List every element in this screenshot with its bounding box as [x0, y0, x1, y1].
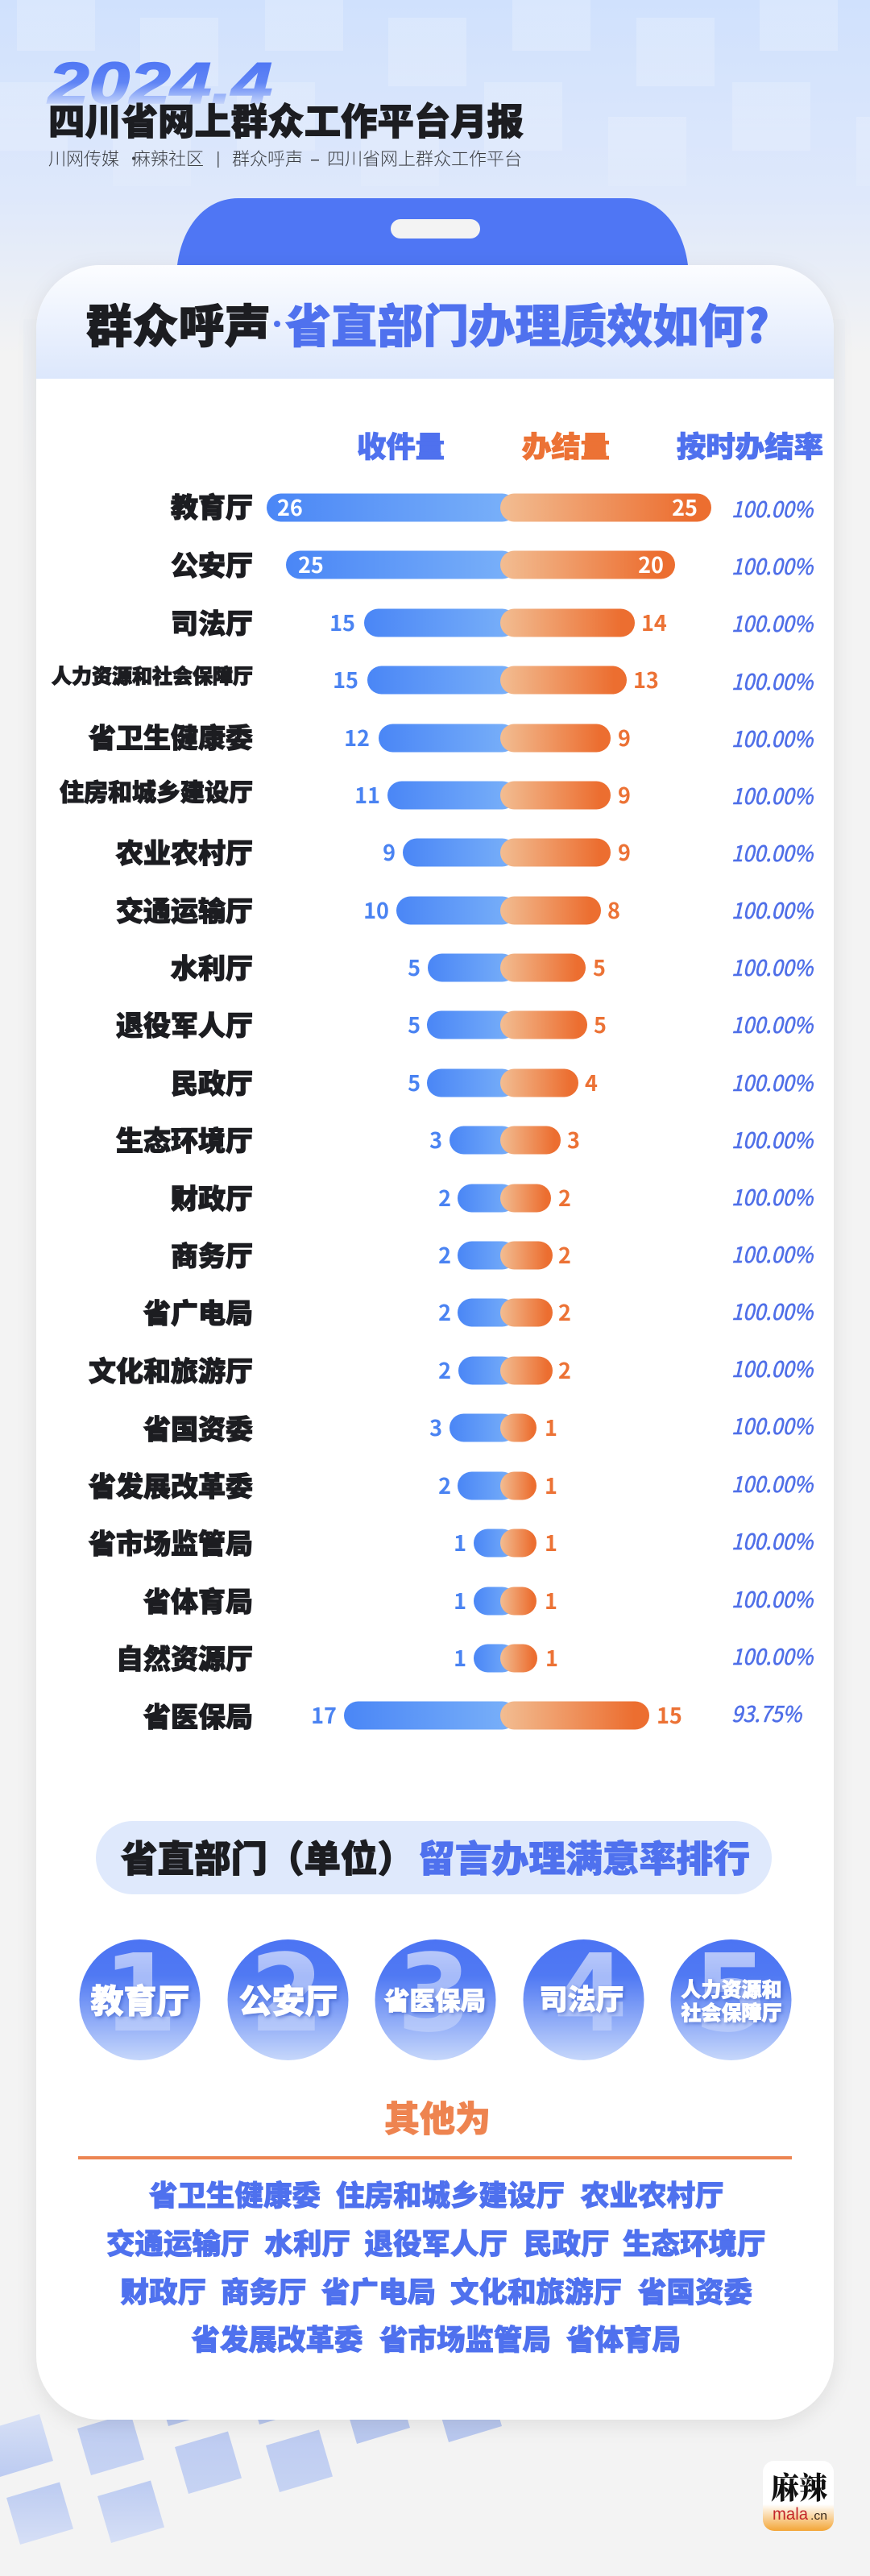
row: 农业农村厅: 9	[618, 836, 631, 867]
row: 民政厅	[171, 1062, 814, 1101]
row: 水利厅	[171, 947, 814, 986]
column headers: 办结量	[522, 424, 610, 466]
row: 交通运输厅: 交通运输厅	[116, 890, 253, 929]
section heading pill: satisfaction ranking: 省直部门（单位）	[121, 1830, 414, 1883]
rank 4 circle: 4	[553, 1932, 628, 2056]
rank 4 circle: 司法厅	[539, 1977, 624, 2018]
row: 省广电局: 100.00%	[731, 1295, 814, 1326]
logo: mala.cn	[763, 2461, 834, 2531]
row: 商务厅: 2	[438, 1238, 451, 1270]
row: 教育厅: 26	[277, 491, 303, 522]
rank 5 circle: 5	[694, 1932, 768, 2056]
others list: 住房和城乡建设厅	[336, 2180, 565, 2212]
rank 1 circle: 教育厅	[90, 1974, 190, 2022]
logo: mala.cn: .cn	[810, 2509, 827, 2523]
others list: 民政厅	[524, 2228, 610, 2260]
row: 教育厅	[171, 486, 814, 525]
row: 交通运输厅: 8	[607, 894, 620, 925]
row: 司法厅: 100.00%	[731, 607, 814, 638]
row: 公安厅: 公安厅	[171, 544, 253, 583]
rank 2 circle: 2	[250, 1932, 324, 2056]
row: 生态环境厅: 100.00%	[731, 1123, 814, 1155]
others list	[106, 2180, 766, 2356]
row: 省体育局: 100.00%	[731, 1583, 814, 1614]
row: 省国资委: 100.00%	[731, 1409, 814, 1441]
row: 生态环境厅: 3	[567, 1123, 580, 1155]
row: 省体育局: 省体育局	[143, 1580, 253, 1620]
row: 省广电局: 2	[438, 1296, 451, 1327]
row: 省市场监管局: 100.00%	[731, 1524, 814, 1556]
row: 人力资源和社会保障厅: 13	[633, 663, 659, 695]
row: 民政厅: 4	[585, 1066, 598, 1097]
others list: 退役军人厅	[364, 2228, 508, 2260]
row: 财政厅: 2	[558, 1181, 571, 1213]
rank 2 circle: 公安厅	[238, 1974, 338, 2022]
section heading pill: satisfaction ranking	[96, 1821, 772, 1894]
row: 民政厅: 民政厅	[171, 1062, 253, 1101]
column headers: 收件量	[357, 424, 445, 466]
row: 文化和旅游厅: 文化和旅游厅	[89, 1350, 253, 1389]
row: 住房和城乡建设厅: 住房和城乡建设厅	[60, 773, 253, 808]
row: 司法厅: 司法厅	[171, 602, 253, 641]
rank 3 circle	[375, 1932, 496, 2060]
row: 住房和城乡建设厅: 11	[354, 778, 380, 810]
main card	[36, 265, 834, 2420]
row: 商务厅: 2	[558, 1238, 571, 1270]
row: 财政厅	[171, 1177, 814, 1217]
row: 人力资源和社会保障厅: 15	[333, 663, 358, 695]
row: 住房和城乡建设厅: 9	[618, 778, 631, 810]
row: 财政厅: 财政厅	[171, 1177, 253, 1217]
others list: 省广电局	[321, 2276, 436, 2308]
row: 商务厅: 商务厅	[171, 1234, 253, 1274]
row: 司法厅	[171, 602, 814, 641]
row: 住房和城乡建设厅: 100.00%	[731, 779, 814, 811]
row: 商务厅	[171, 1234, 814, 1274]
row: 人力资源和社会保障厅: 人力资源和社会保障厅	[52, 661, 253, 690]
rank 1 circle	[79, 1932, 200, 2060]
row: 公安厅: 20	[638, 548, 664, 579]
card title: 群众呼声	[86, 290, 271, 356]
row: 省卫生健康委: 100.00%	[731, 722, 814, 753]
others list: 财政厅	[121, 2276, 206, 2308]
column headers: 按时办结率	[677, 424, 823, 466]
others list: 生态环境厅	[623, 2228, 766, 2260]
subtitle: 麻辣社区	[133, 145, 204, 171]
row: 省国资委: 3	[429, 1411, 442, 1442]
column headers	[357, 424, 823, 466]
row: 省国资委	[143, 1408, 814, 1447]
row: 退役军人厅: 5	[594, 1008, 607, 1039]
row: 人力资源和社会保障厅	[52, 661, 814, 696]
row: 住房和城乡建设厅	[60, 773, 814, 811]
row: 文化和旅游厅: 2	[558, 1354, 571, 1385]
row: 文化和旅游厅: 2	[438, 1354, 451, 1385]
row: 省卫生健康委: 省卫生健康委	[89, 716, 253, 756]
rank 3 circle: 省医保局	[384, 1981, 486, 2018]
others list: 交通运输厅	[106, 2228, 250, 2260]
section heading pill: satisfaction ranking: 留言办理满意率排行	[418, 1830, 750, 1883]
subtitle	[48, 145, 522, 171]
others heading: 其他为	[384, 2090, 491, 2142]
others list: 省发展改革委	[192, 2324, 363, 2356]
row: 省市场监管局: 1	[545, 1526, 557, 1558]
row: 自然资源厅: 1	[545, 1641, 558, 1673]
clipboard tab	[177, 198, 688, 270]
row: 司法厅: 15	[329, 606, 355, 637]
row: 省卫生健康委	[89, 716, 814, 756]
main title: 四川省网上群众工作平台月报	[48, 93, 524, 146]
rank 5 circle	[670, 1932, 791, 2060]
row: 生态环境厅: 生态环境厅	[116, 1119, 253, 1159]
row: 自然资源厅: 100.00%	[731, 1640, 814, 1671]
row: 省广电局	[143, 1292, 814, 1331]
rank 2 circle	[227, 1932, 348, 2060]
row: 省发展改革委: 1	[545, 1469, 557, 1500]
row: 交通运输厅: 10	[363, 894, 389, 925]
row: 省广电局: 省广电局	[143, 1292, 253, 1331]
row: 省医保局: 省医保局	[143, 1695, 253, 1735]
row: 生态环境厅: 3	[429, 1123, 442, 1155]
subtitle: ·	[125, 145, 143, 171]
others list: 省国资委	[638, 2276, 752, 2308]
row: 省市场监管局: 省市场监管局	[89, 1522, 253, 1562]
others list: 省卫生健康委	[149, 2180, 321, 2212]
row: 交通运输厅	[116, 890, 814, 929]
row: 自然资源厅: 自然资源厅	[116, 1637, 253, 1677]
row: 农业农村厅	[116, 832, 814, 871]
row: 农业农村厅: 9	[383, 836, 396, 867]
subtitle: 群众呼声	[232, 145, 303, 171]
row: 水利厅: 5	[593, 951, 606, 982]
row: 财政厅: 100.00%	[731, 1180, 814, 1212]
rank 5 circle: 人力资源和	[681, 1974, 782, 2003]
row: 省体育局	[143, 1580, 814, 1620]
subtitle: 川网传媒	[48, 145, 119, 171]
row: 交通运输厅: 100.00%	[731, 894, 814, 925]
others list: 商务厅	[221, 2276, 307, 2308]
row: 省医保局: 93.75%	[731, 1697, 803, 1728]
row: 公安厅	[171, 544, 814, 583]
row: 退役军人厅: 5	[408, 1008, 420, 1039]
row: 公安厅: 100.00%	[731, 550, 814, 581]
row: 省医保局	[143, 1695, 803, 1735]
row: 自然资源厅	[116, 1637, 814, 1677]
rank 4 circle	[524, 1932, 644, 2060]
row: 农业农村厅: 农业农村厅	[116, 832, 253, 871]
row: 水利厅: 100.00%	[731, 951, 814, 982]
card title: 省直部门办理质效如何?	[285, 290, 769, 356]
others list: 农业农村厅	[581, 2180, 724, 2212]
row: 退役军人厅: 退役军人厅	[116, 1004, 253, 1043]
row: 教育厅: 教育厅	[171, 486, 253, 525]
row: 农业农村厅: 100.00%	[731, 836, 814, 868]
rank 3 circle: 3	[397, 1932, 471, 2056]
row: 省发展改革委	[89, 1465, 814, 1504]
row: 省发展改革委: 100.00%	[731, 1467, 814, 1499]
row: 水利厅: 5	[408, 951, 420, 982]
row: 退役军人厅: 100.00%	[731, 1008, 814, 1039]
decoration: bottom parallelogram pattern	[0, 2362, 502, 2545]
row: 省市场监管局: 1	[454, 1526, 466, 1558]
others list: 省体育局	[566, 2324, 681, 2356]
row: 省卫生健康委: 9	[618, 721, 631, 753]
others list: 水利厅	[264, 2228, 350, 2260]
others list: 省市场监管局	[379, 2324, 551, 2356]
row: 财政厅: 2	[438, 1181, 451, 1213]
row: 人力资源和社会保障厅: 100.00%	[731, 665, 814, 696]
year heading: 2024.4	[46, 52, 272, 116]
row: 教育厅: 25	[672, 491, 698, 522]
row: 民政厅: 100.00%	[731, 1066, 814, 1097]
row: 文化和旅游厅: 100.00%	[731, 1352, 814, 1383]
logo: mala.cn: mala	[773, 2505, 808, 2524]
row: 退役军人厅	[116, 1004, 814, 1043]
rank 5 circle: 社会保障厅	[681, 1997, 782, 2026]
row: 生态环境厅	[116, 1119, 814, 1159]
row: 省发展改革委: 省发展改革委	[89, 1465, 253, 1504]
row: 省医保局: 15	[657, 1699, 682, 1730]
row: 公安厅: 25	[298, 548, 324, 579]
subtitle: 四川省网上群众工作平台	[327, 145, 522, 171]
row: 民政厅: 5	[408, 1066, 420, 1097]
row: 省市场监管局	[89, 1522, 814, 1562]
row: 省国资委: 省国资委	[143, 1408, 253, 1447]
row: 商务厅: 100.00%	[731, 1238, 814, 1269]
row: 水利厅: 水利厅	[171, 947, 253, 986]
row: 文化和旅游厅	[89, 1350, 814, 1389]
row: 省体育局: 1	[545, 1584, 557, 1616]
row: 自然资源厅: 1	[454, 1641, 466, 1673]
row: 省国资委: 1	[545, 1411, 557, 1442]
row: 省体育局: 1	[454, 1584, 466, 1616]
row: 省广电局: 2	[558, 1296, 571, 1327]
row: 司法厅: 14	[641, 606, 667, 637]
row: 教育厅: 100.00%	[731, 492, 814, 524]
rank 1 circle: 1	[103, 1932, 177, 2056]
others list: 文化和旅游厅	[450, 2276, 622, 2308]
row: 省发展改革委: 2	[438, 1469, 451, 1500]
row: 省卫生健康委: 12	[344, 721, 370, 753]
row: 省医保局: 17	[311, 1699, 337, 1730]
logo: mala.cn: 麻辣	[771, 2463, 827, 2508]
